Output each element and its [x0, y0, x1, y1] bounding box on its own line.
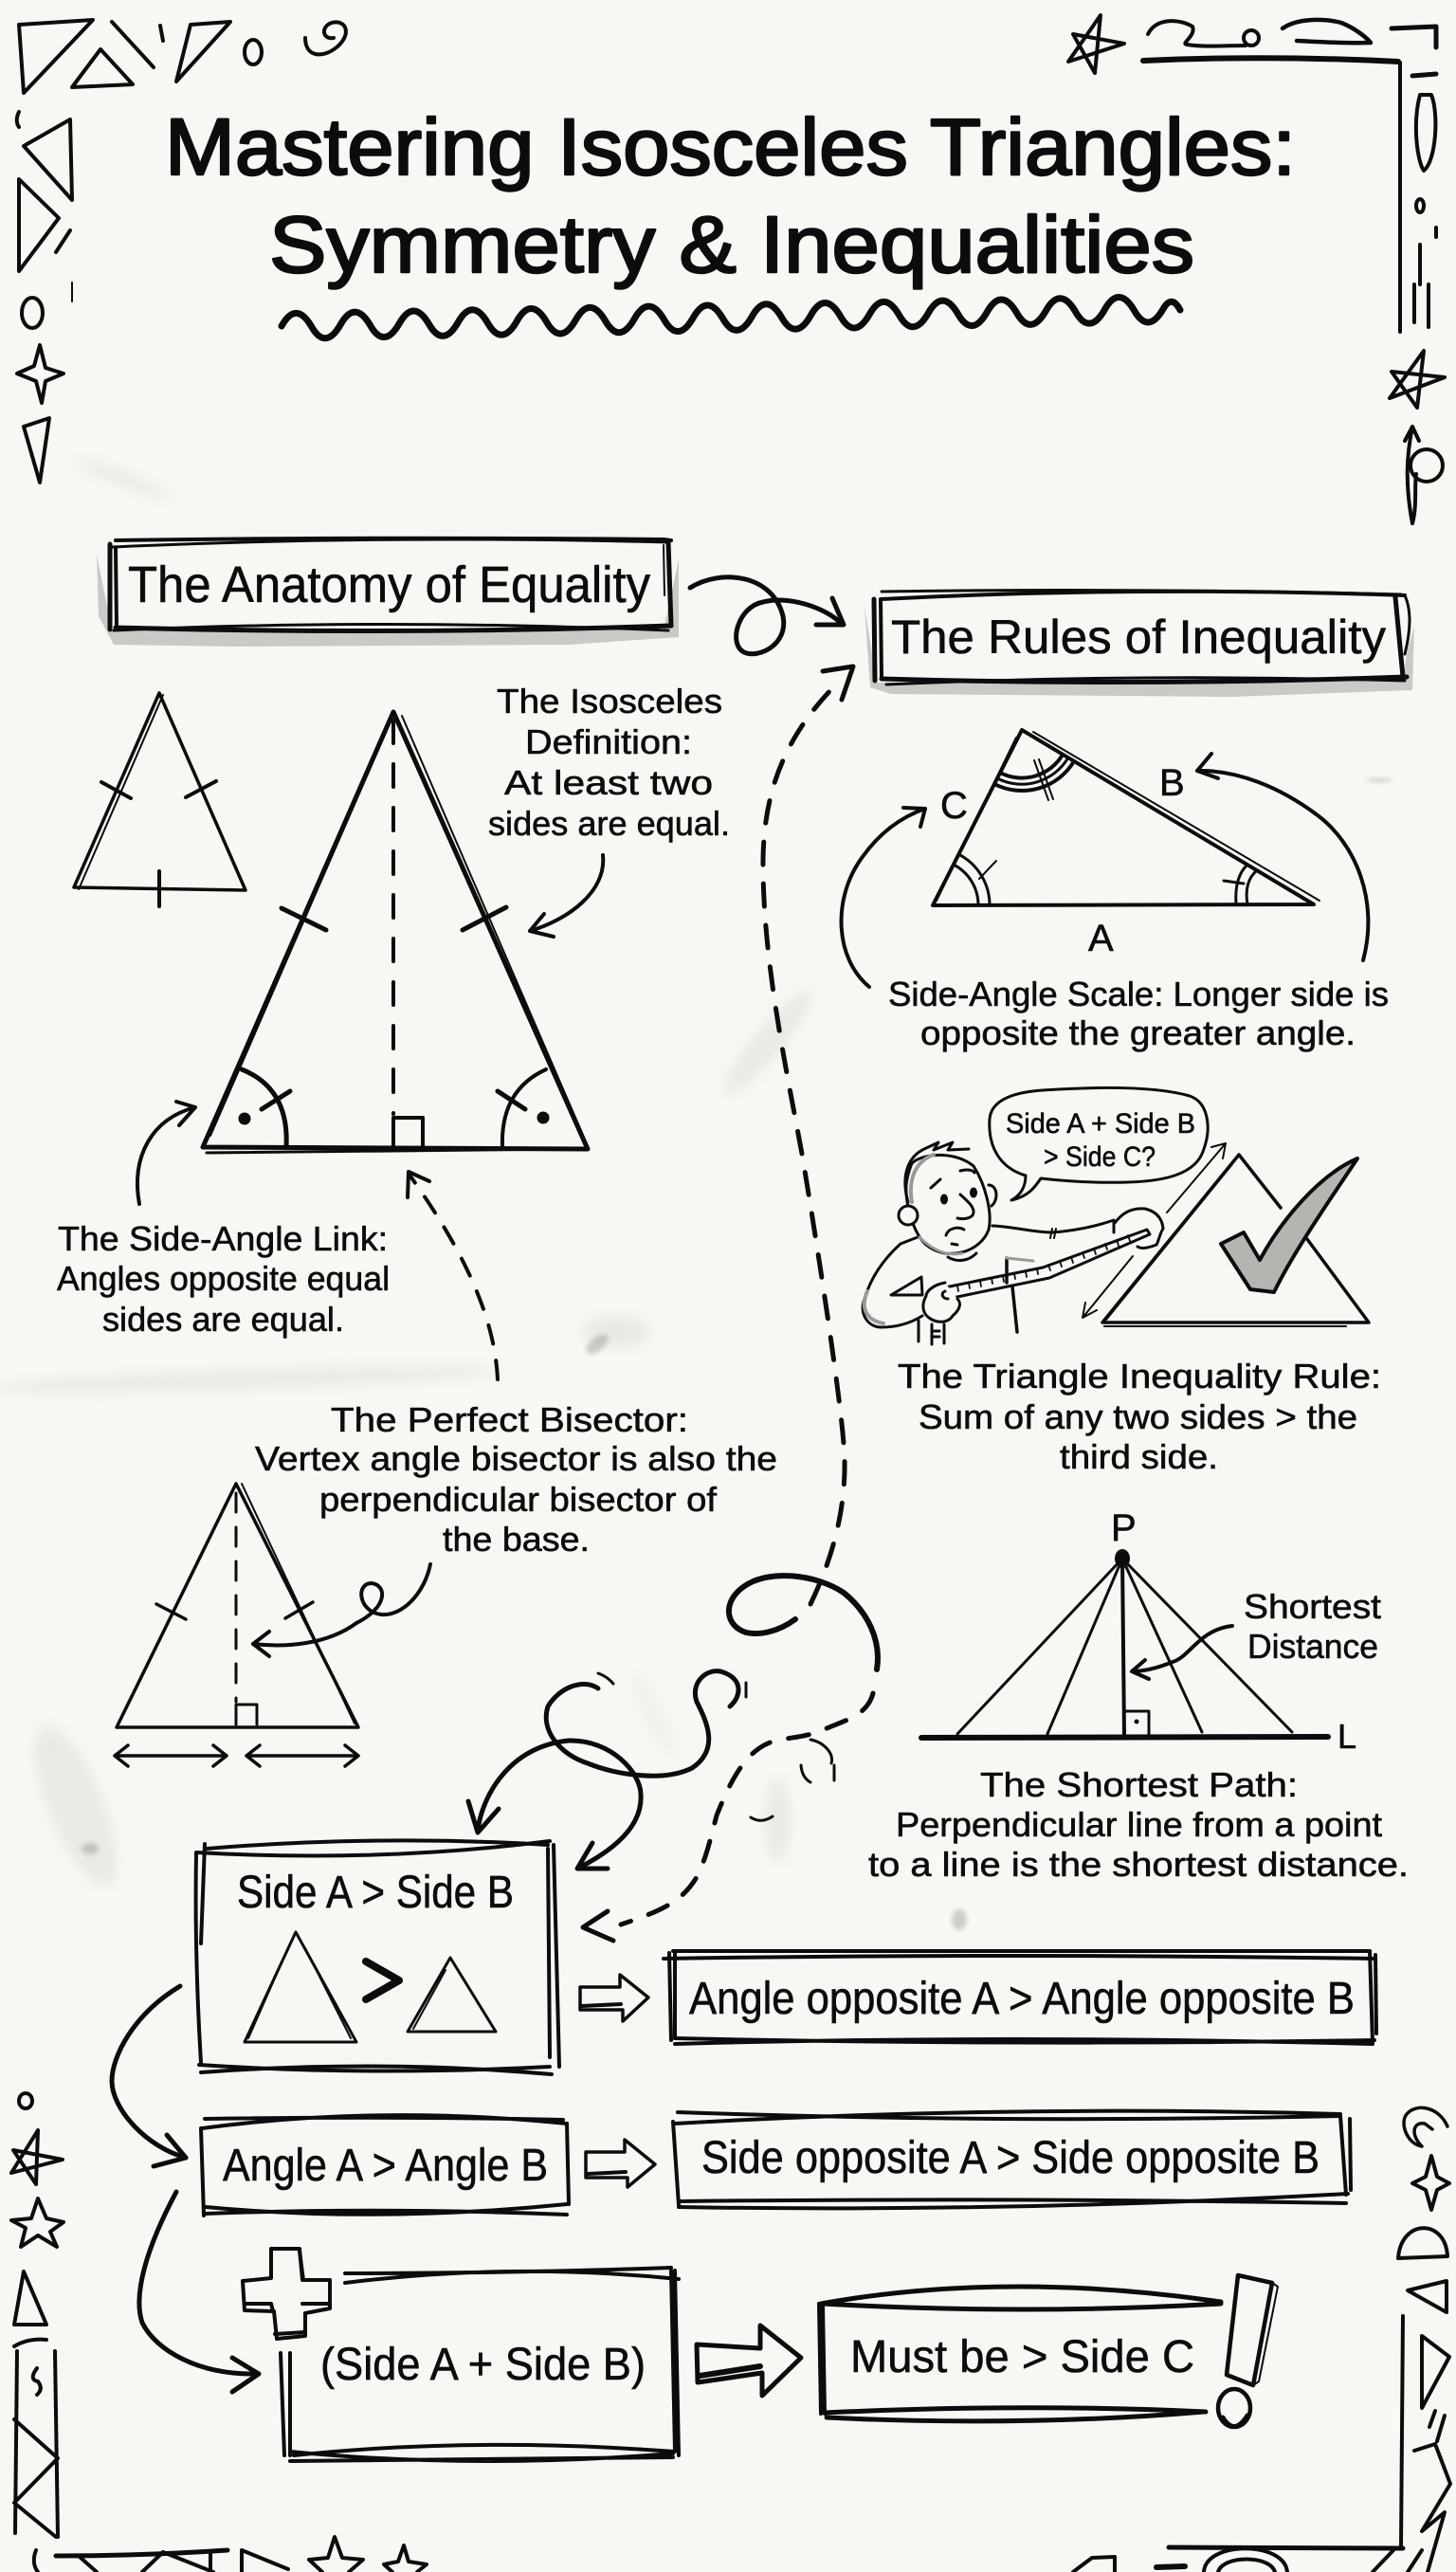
arrow: curved into top of Side A box [468, 1741, 641, 1869]
text: the perfect bisector: the base. [443, 1520, 590, 1559]
decorative border: top right frame [1068, 15, 1445, 523]
box: Side A > Side B [196, 1840, 559, 2074]
text: side-angle scale: Side-Angle Scale: Longer side is [888, 975, 1389, 1013]
label: shortest distance with arrow: Shortest [1244, 1587, 1381, 1626]
text: the perfect bisector [255, 1400, 777, 1559]
text: the isosceles definition [488, 682, 730, 843]
curved arrow: box 1 to Angle A box [112, 1986, 186, 2166]
box: Side opposite A > Side opposite B [673, 2111, 1351, 2208]
box: Must be > Side C: Must be > Side C [850, 2332, 1194, 2382]
text: the isosceles definition: Definition: [525, 722, 692, 761]
decorative border: bottom left frame [11, 2093, 427, 2572]
box: Side A > Side B: Side A > Side B [237, 1868, 514, 1918]
text: the isosceles definition: sides are equal. [488, 804, 730, 843]
text: the side-angle link: sides are equal. [102, 1300, 344, 1339]
decorative border: left column doodles [17, 112, 72, 483]
text: the perfect bisector: The Perfect Bisector: [331, 1400, 688, 1439]
icon: exclamation mark [1218, 2275, 1278, 2427]
speech bubble [990, 1088, 1208, 1200]
speech bubble: > Side C? [1044, 1141, 1156, 1173]
decorative border: bottom right frame [1073, 2107, 1450, 2572]
small triangle with three tick marks [74, 693, 246, 906]
diagram: point P and line L with rays: L [1338, 1717, 1356, 1756]
box: Angle A > Angle B [201, 2115, 569, 2216]
arrow: definition to triangle side [530, 855, 603, 937]
text: the triangle inequality rule: Sum of any two sides > the [919, 1397, 1357, 1436]
diagram: point P and line L with rays: P [1111, 1507, 1137, 1549]
box: (Side A + Side B) [281, 2268, 679, 2461]
text: the side-angle link: The Side-Angle Link: [58, 1219, 388, 1258]
box: (Side A + Side B): (Side A + Side B) [320, 2340, 646, 2390]
box: Must be > Side C [819, 2287, 1221, 2421]
swirl: solid loop on dashed connector [729, 1576, 878, 1669]
speech bubble: Side A + Side B [1006, 1108, 1195, 1140]
text: the shortest path: to a line is the shortest distance. [868, 1845, 1409, 1884]
swirl: S-shaped flourish [546, 1671, 738, 1776]
box: Angle opposite A > Angle opposite B: Angle opposite A > Angle opposite B [689, 1974, 1355, 2024]
decorative border: top left doodles [19, 20, 346, 93]
block arrow: side to angle [580, 1975, 648, 2021]
title: Mastering Isosceles Triangles: [165, 102, 1296, 192]
text: the side-angle link [57, 1219, 390, 1339]
label: shortest distance with arrow [1132, 1587, 1381, 1679]
diagram: point P and line L with rays [921, 1507, 1356, 1756]
scalene triangle vertex labels: C [940, 785, 968, 827]
arrow: looped, bisector text to altitude [253, 1564, 430, 1656]
arrow: loop from Anatomy banner to Rules banner [690, 577, 844, 654]
title [165, 102, 1296, 289]
section banner: The Anatomy of Equality [97, 538, 679, 647]
large isosceles triangle with altitude and angle marks [203, 712, 588, 1153]
triangle with grey check mark and measure arrows [1083, 1143, 1369, 1326]
illustration: person measuring with a ruler [863, 1142, 1163, 1344]
scalene triangle vertex labels: B [1159, 762, 1185, 804]
scalene triangle vertex labels [940, 762, 1185, 959]
label: shortest distance with arrow: Distance [1247, 1627, 1378, 1666]
text: the isosceles definition: The Isosceles [497, 682, 722, 721]
text: side-angle scale: opposite the greater angle. [920, 1013, 1356, 1052]
box: Angle opposite A > Angle opposite B [664, 1951, 1376, 2044]
arrow: to side B [1197, 754, 1368, 960]
text: the shortest path [868, 1765, 1409, 1884]
text: side-angle scale [888, 975, 1389, 1052]
arrow: dashed, perfect bisector to right angle [408, 1172, 498, 1379]
section banner: The Rules of Inequality [864, 591, 1414, 697]
bisector triangle with dimension arrows [115, 1484, 358, 1766]
text: the perfect bisector: Vertex angle bisector is also the [255, 1439, 777, 1478]
box: Side opposite A > Side opposite B: Side opposite A > Side opposite B [701, 2133, 1320, 2183]
arrow: dashed connector into Side A box [583, 1673, 873, 1941]
text: the perfect bisector: perpendicular bisector of [319, 1480, 718, 1519]
text: the side-angle link: Angles opposite equal [57, 1259, 390, 1298]
title: Symmetry & Inequalities [269, 200, 1194, 289]
section banner: The Rules of Inequality: The Rules of Inequality [891, 611, 1386, 664]
title wavy underline [282, 298, 1180, 338]
scalene triangle: side-angle scale [933, 730, 1320, 905]
text: the triangle inequality rule: third side. [1060, 1437, 1218, 1476]
text: the shortest path: Perpendicular line from a point [896, 1805, 1382, 1844]
arrow: side-angle link to base angle [137, 1102, 195, 1204]
block arrow: angle to side [586, 2140, 655, 2187]
section banner: The Anatomy of Equality: The Anatomy of Equality [128, 556, 650, 613]
curved arrow: Angle A box to sum box [139, 2192, 259, 2392]
scalene triangle vertex labels: A [1088, 918, 1114, 959]
box: Angle A > Angle B: Angle A > Angle B [223, 2141, 548, 2191]
icon: 3D plus sign [243, 2249, 330, 2339]
text: the shortest path: The Shortest Path: [980, 1765, 1298, 1804]
arrow: to side C [842, 808, 925, 987]
text: the triangle inequality rule: The Triangle Inequality Rule: [898, 1357, 1381, 1395]
text: the isosceles definition: At least two [504, 763, 713, 802]
text: the triangle inequality rule [898, 1357, 1381, 1476]
block arrow: sum to result [697, 2326, 801, 2396]
arrow: dashed path from flow section up to Rules banner [763, 666, 853, 1604]
